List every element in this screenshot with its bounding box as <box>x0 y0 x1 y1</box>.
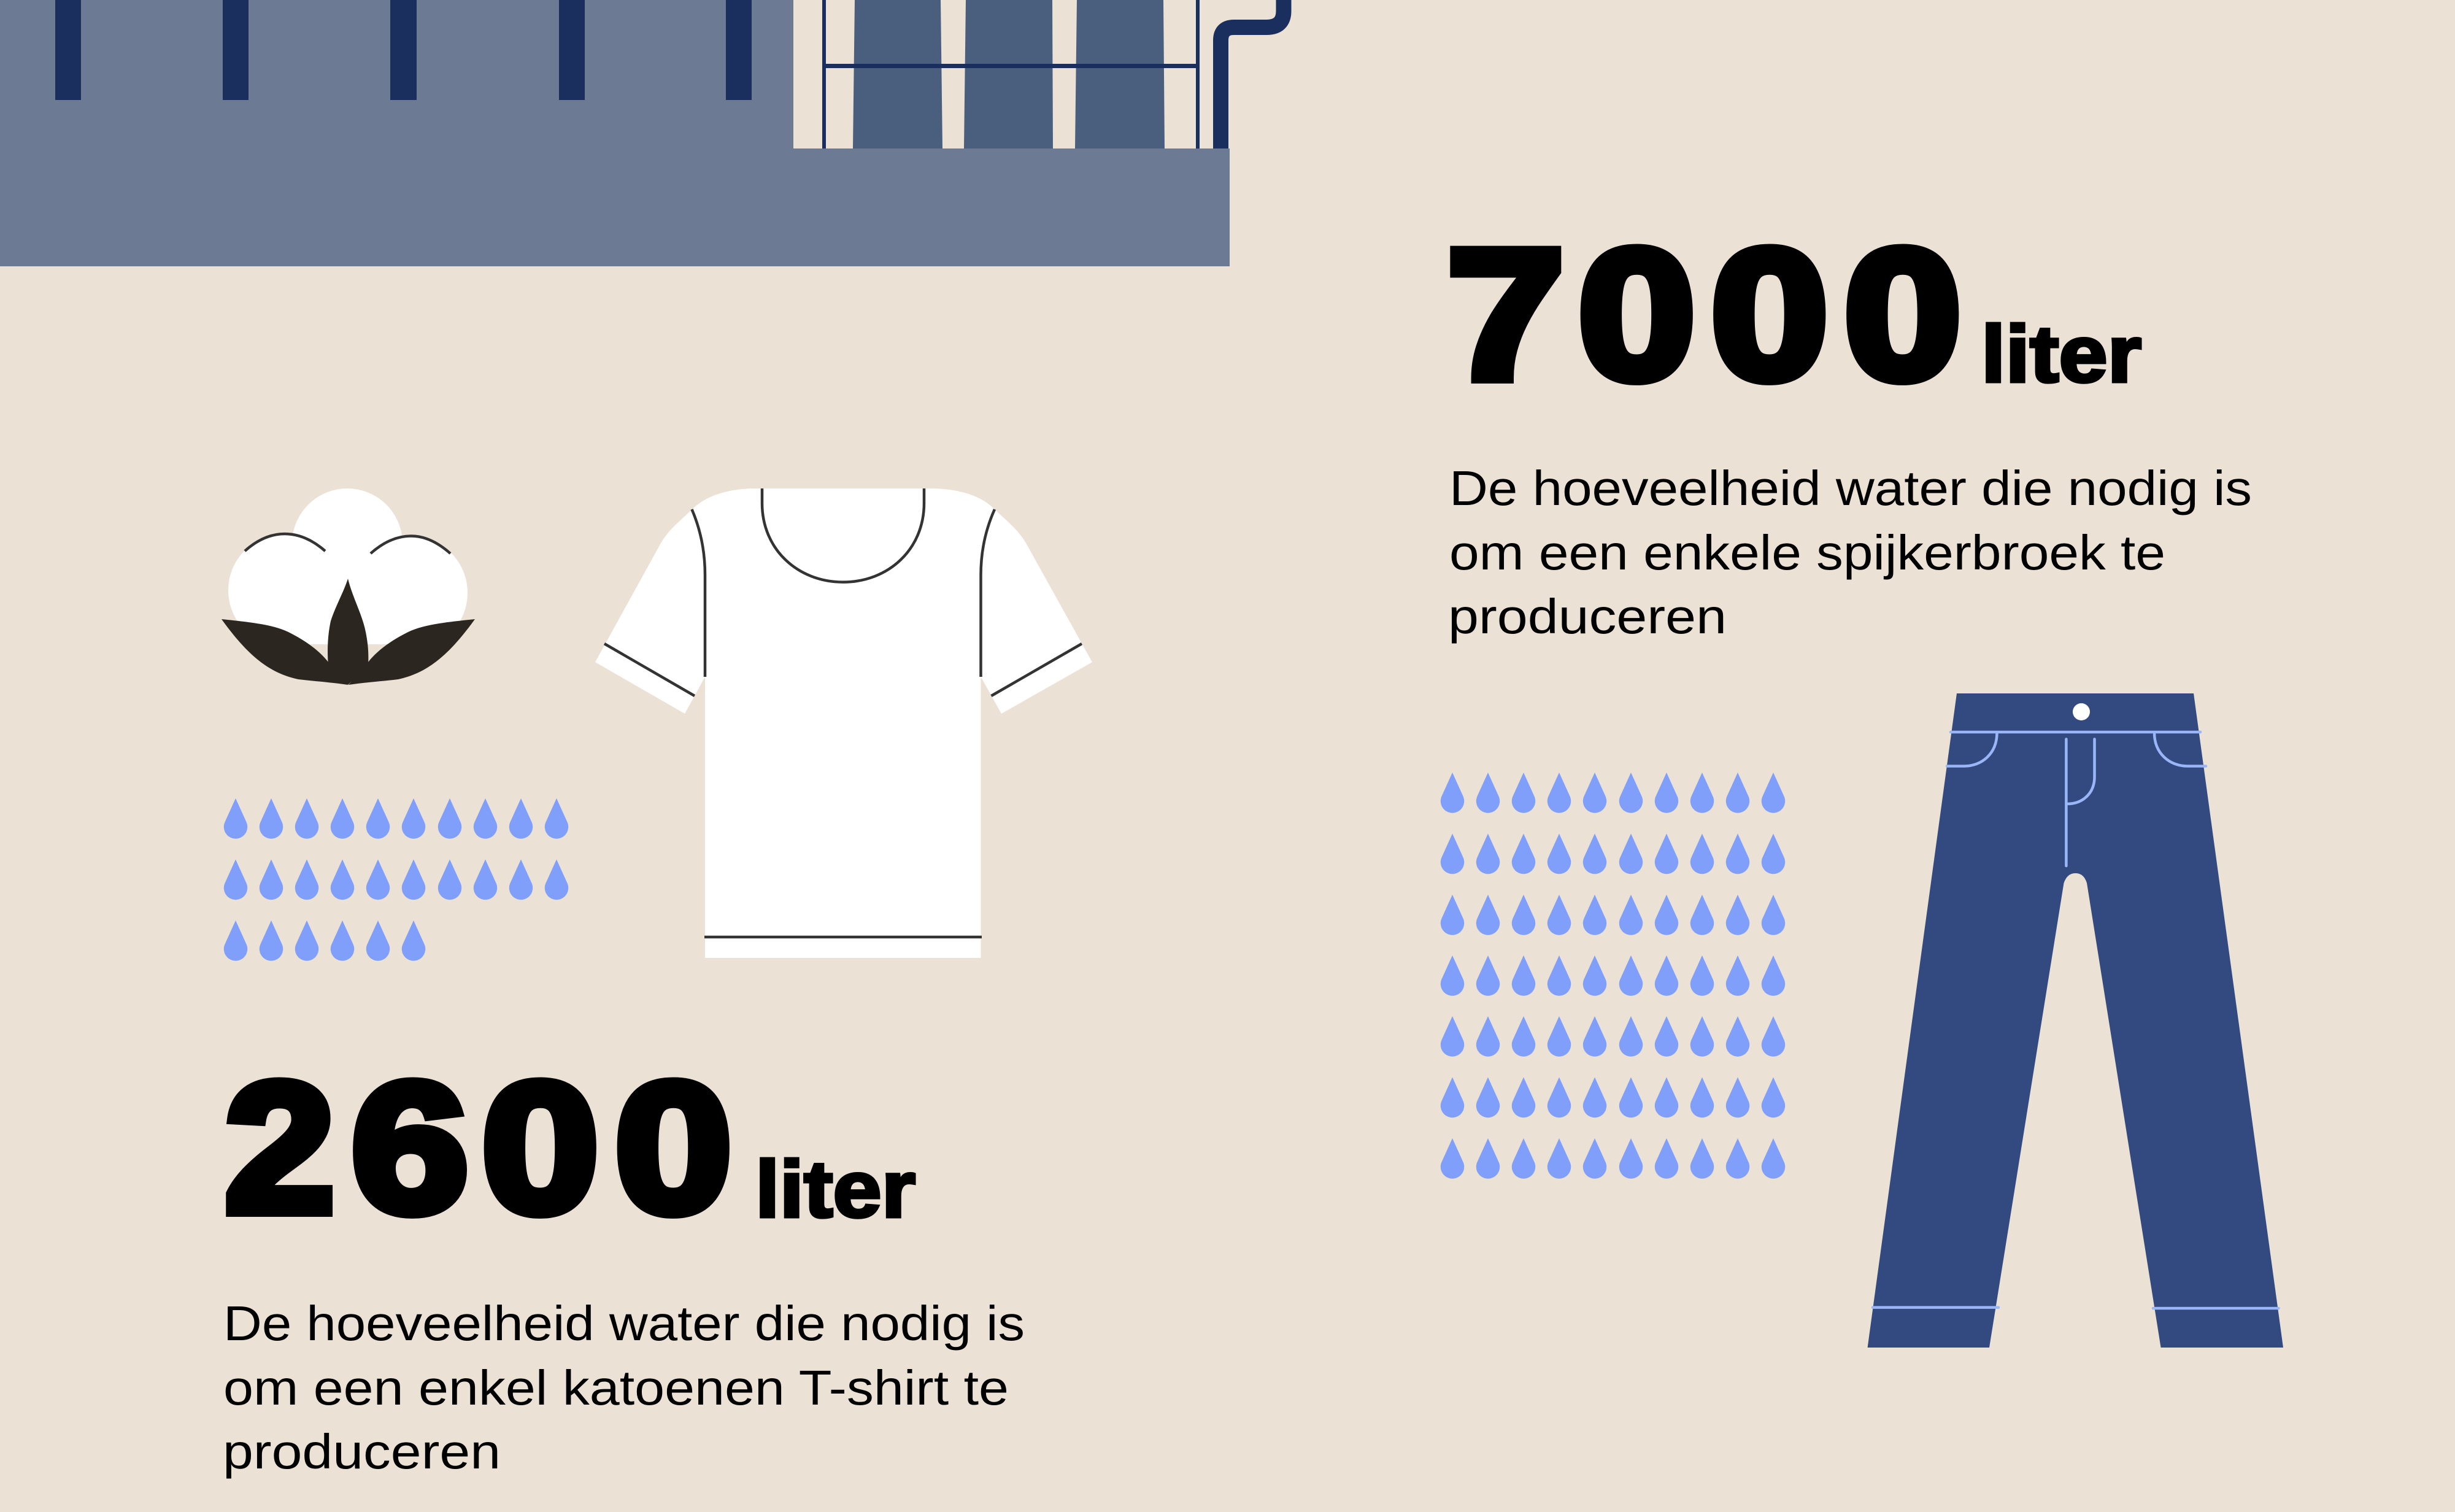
text block: jeans description <box>1448 461 2252 644</box>
cotton leaves <box>222 579 475 685</box>
heading: 7000 liter: liter <box>1981 309 2141 399</box>
cotton puff outlines <box>245 534 450 554</box>
hanging denim fabric panels <box>853 0 1165 148</box>
jeans button <box>2073 703 2090 720</box>
icon: cotton boll <box>222 488 475 685</box>
shirt seams <box>604 488 1082 937</box>
jeans shape <box>1868 693 2283 1348</box>
text block: t-shirt description: om een enkel katoenen T-shirt te <box>223 1360 1009 1415</box>
shirt body <box>595 488 1092 958</box>
water drops: 2600 liter <box>224 798 568 961</box>
dark vertical columns <box>55 0 752 100</box>
drying rack frame <box>822 0 1200 148</box>
icon: white t-shirt <box>595 488 1092 958</box>
heading: 7000 liter: 0 <box>1844 212 1961 417</box>
heading: 7000 liter: 0 <box>1578 212 1695 417</box>
heading: 7000 liter: 7 <box>1447 212 1564 417</box>
text block: t-shirt description: produceren <box>223 1424 501 1479</box>
text block: jeans description: De hoeveelheid water die nodig is <box>1449 461 2252 515</box>
heading: 2600 liter <box>225 1045 915 1251</box>
heading: 2600 liter: 0 <box>615 1046 732 1251</box>
water pipe <box>1221 0 1284 148</box>
icon: jeans <box>1868 693 2283 1348</box>
jeans stitching <box>1873 732 2279 1308</box>
heading: 7000 liter: 0 <box>1711 212 1828 417</box>
heading: 2600 liter: 2 <box>225 1045 334 1251</box>
factory wall <box>0 0 1230 266</box>
text block: jeans description: om een enkele spijkerbroek te <box>1449 525 2165 580</box>
heading: 7000 liter <box>1447 212 2141 417</box>
heading: 2600 liter: 6 <box>352 1046 468 1251</box>
text block: jeans description: produceren <box>1448 589 1727 644</box>
cotton puffs <box>228 488 468 649</box>
text block: t-shirt description <box>223 1296 1025 1479</box>
heading: 2600 liter: liter <box>755 1144 915 1234</box>
water drops: 7000 liter <box>1441 773 1785 1179</box>
heading: 2600 liter: 0 <box>482 1046 599 1251</box>
text block: t-shirt description: De hoeveelheid water die nodig is <box>223 1296 1025 1351</box>
factory building illustration <box>0 0 1284 266</box>
